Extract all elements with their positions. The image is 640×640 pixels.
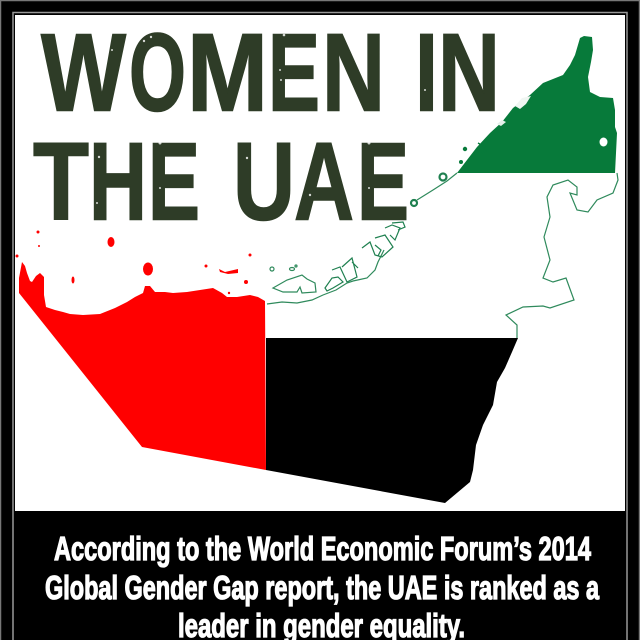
- map of the UAE in flag colours: [16, 36, 618, 503]
- title: T: [33, 120, 89, 244]
- map: green northern section: [457, 36, 617, 173]
- title: A: [294, 120, 354, 244]
- title: H: [89, 120, 147, 244]
- text block: gender equality statement: [45, 530, 599, 640]
- title distress specks: [96, 34, 426, 204]
- title: I: [415, 12, 438, 134]
- title: W: [41, 12, 126, 134]
- title: N: [322, 12, 385, 134]
- title: E: [357, 120, 409, 244]
- map: outlined white coastline and border: [267, 173, 618, 338]
- title: E: [148, 120, 200, 244]
- map: black south-eastern section: [266, 338, 518, 503]
- title: U: [233, 120, 295, 244]
- title: E: [268, 12, 320, 134]
- title: O: [129, 12, 186, 134]
- title: M: [187, 12, 268, 134]
- title: N: [438, 12, 500, 134]
- panel: white map area: [15, 15, 625, 511]
- title: [33, 12, 500, 244]
- map: red western section: [16, 230, 266, 470]
